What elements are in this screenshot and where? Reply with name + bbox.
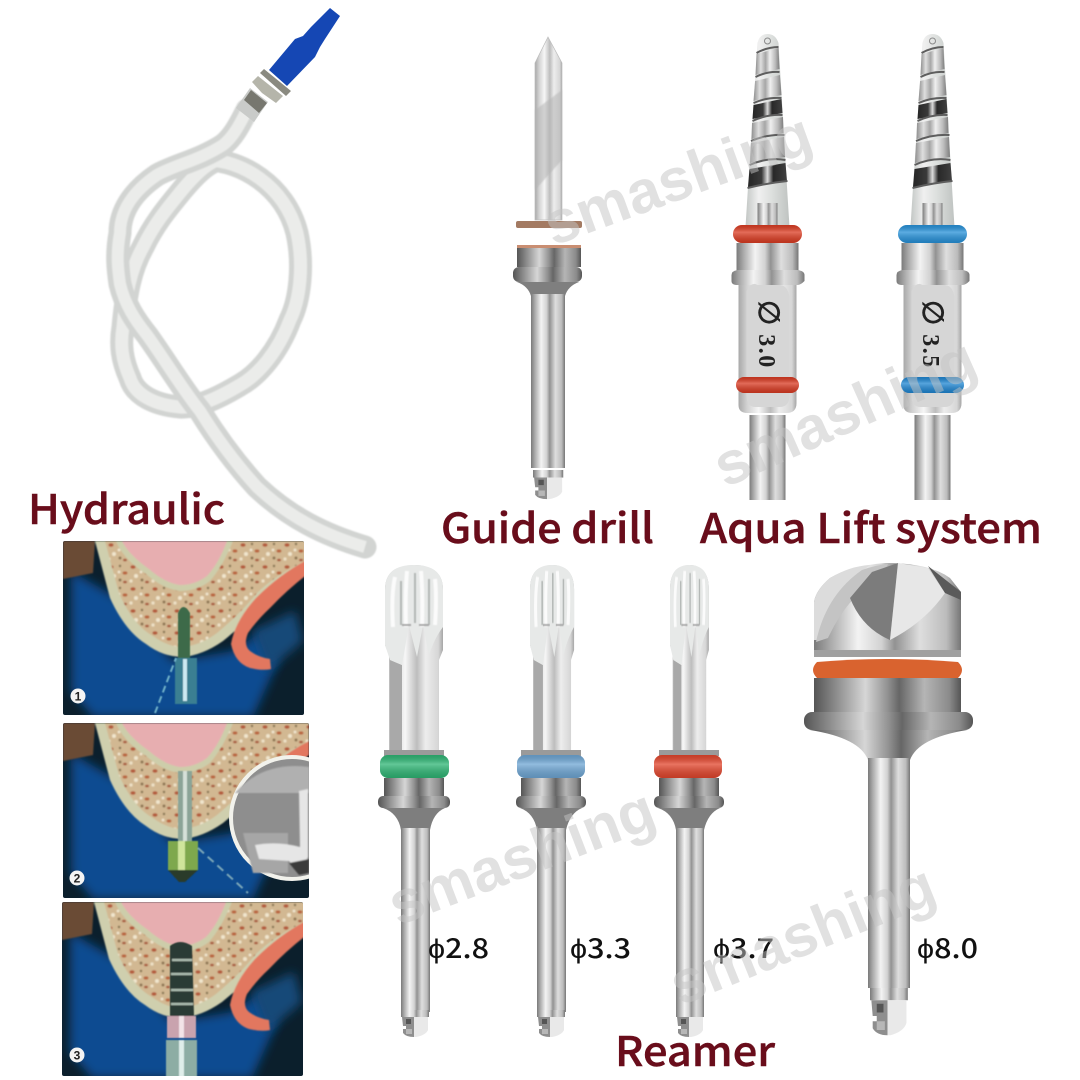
heading: Reamer: Reamer <box>615 1018 775 1078</box>
heading: Hydraulic: Hydraulic <box>28 476 225 536</box>
diameter labels: ϕ8.0 <box>917 927 978 966</box>
tool: reamer 2.8 <box>378 565 450 1037</box>
green ring <box>380 755 449 778</box>
diameter labels: ϕ3.7 <box>713 927 774 966</box>
watermarks: smashing <box>535 99 821 258</box>
tool: implant with pink collar <box>166 942 197 1078</box>
panel: step 2 illustration <box>63 723 309 898</box>
step number 2 <box>70 870 84 886</box>
tool: aqua lift 3.5 <box>896 34 970 500</box>
tool: reamer 3.7 <box>654 565 724 1037</box>
panel: step 3 illustration <box>62 902 308 1078</box>
tool: reamer 3.3 <box>516 565 586 1037</box>
red ring <box>654 755 722 778</box>
tool: guide drill <box>513 37 582 499</box>
step number 1 <box>70 688 86 704</box>
size label 3.5: ∅ 3.5 <box>916 300 948 369</box>
panel: step 1 illustration <box>63 541 309 717</box>
watermarks: smashing <box>660 851 945 1018</box>
size label 3.0: ∅ 3.0 <box>752 300 784 369</box>
tool: reamer 8.0 <box>804 563 973 1035</box>
diameter labels: ϕ2.8 <box>428 927 489 966</box>
tool: aqua lift 3.0 <box>732 34 804 500</box>
heading: Guide drill: Guide drill <box>441 495 654 555</box>
watermarks: smashing <box>703 325 986 500</box>
watermarks <box>379 99 986 1018</box>
diameter labels: ϕ3.3 <box>570 927 631 966</box>
step number 3: 3 <box>74 1048 81 1062</box>
diameter labels <box>428 927 978 966</box>
watermarks: smashing <box>379 775 664 938</box>
step number 1: 1 <box>75 690 82 704</box>
orange ring <box>813 659 962 678</box>
step number 3 <box>70 1048 84 1062</box>
inset: x-ray circle <box>229 755 309 881</box>
blue sealing rings <box>898 225 967 393</box>
tool: guide with green sleeve <box>168 771 248 893</box>
heading: Aqua Lift system: Aqua Lift system <box>700 495 1042 555</box>
icon: hydraulic tube with blue connector <box>118 8 365 547</box>
red sealing rings <box>733 225 802 393</box>
step number 2: 2 <box>74 872 81 886</box>
tool: drill in bone <box>155 607 197 713</box>
blue ring <box>517 755 585 778</box>
blue connector cap <box>269 8 340 86</box>
